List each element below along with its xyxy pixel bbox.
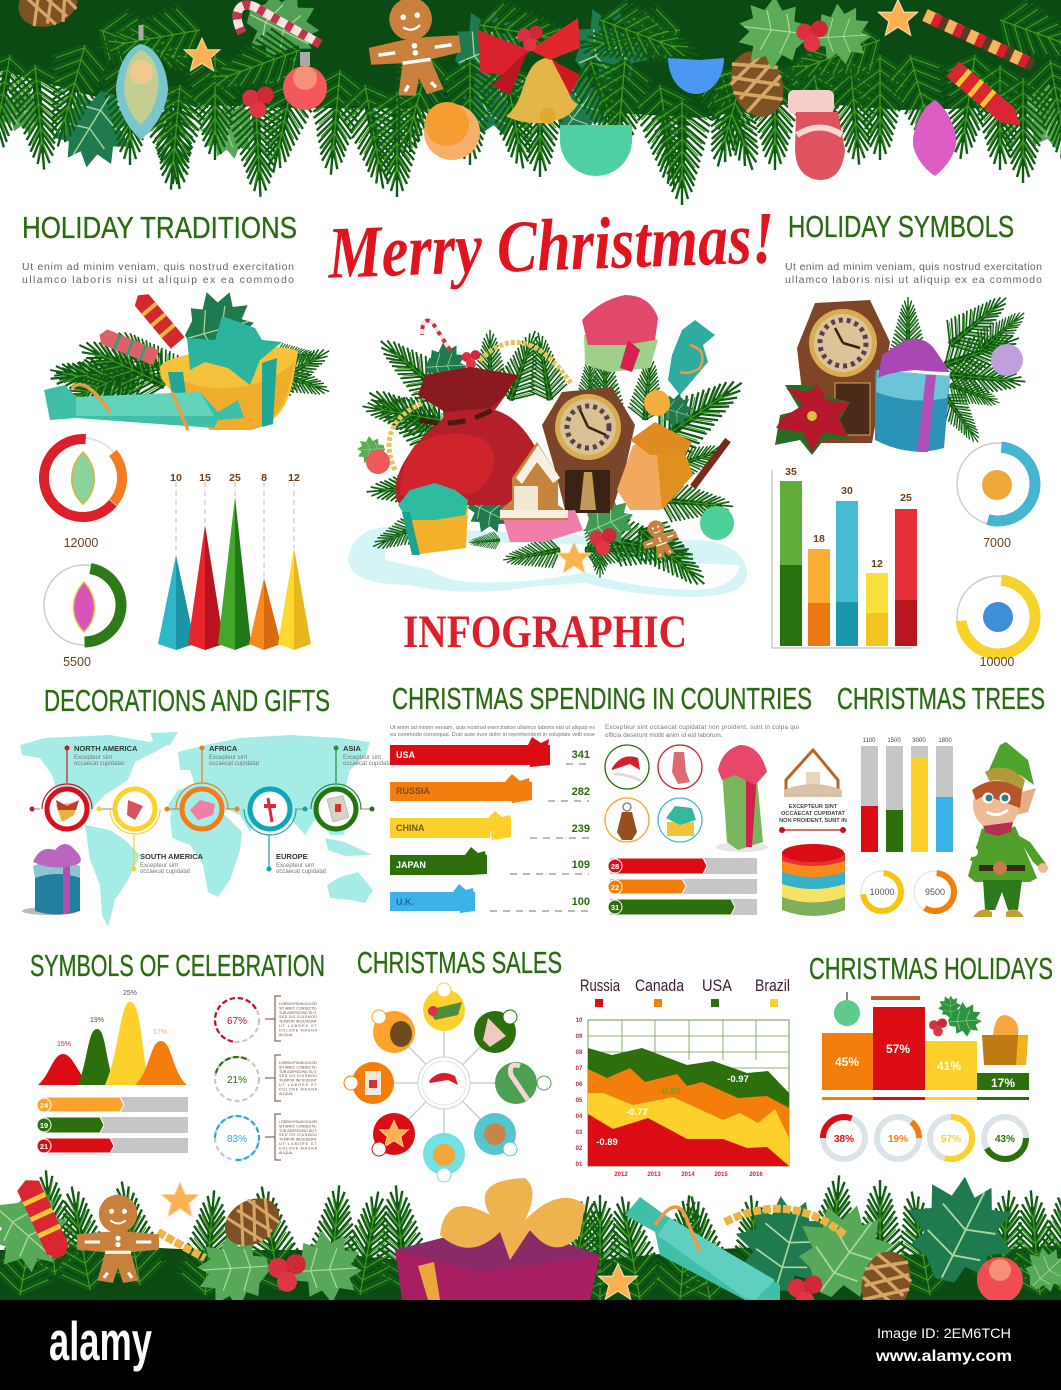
area chart [576, 1018, 789, 1178]
chart legend: USA [702, 976, 733, 995]
donut: 19%: 19% [888, 1134, 908, 1145]
node: star [372, 1113, 415, 1156]
europe marker: EUROPE [276, 852, 308, 861]
note 2: TUR ADIPISCING ELIT, [279, 1070, 317, 1074]
snow base [348, 527, 747, 597]
heading: symbols of celebration: SYMBOLS OF CELEBRATION [30, 948, 325, 983]
europe marker [244, 789, 326, 875]
text: excepteur note: officia deserunt mollit anim id est laborum. [605, 732, 723, 739]
progress bars: celebration: 19 [40, 1121, 48, 1130]
bar: UK [390, 884, 475, 913]
area values: -0.97 [727, 1074, 749, 1085]
icon: blue ball [983, 602, 1013, 632]
north america marker [30, 744, 138, 829]
values [170, 472, 300, 484]
note 1: LOREM IPSUM DOLOR [279, 1002, 317, 1006]
node: orange ball [423, 1133, 465, 1182]
bead garland [389, 342, 572, 470]
rocket candy [131, 290, 185, 349]
gauge 21%: 21% [227, 1075, 247, 1086]
holly leaves [357, 342, 698, 554]
gingerbread man [77, 1195, 159, 1283]
africa marker [164, 744, 259, 829]
values: 239 [572, 823, 590, 835]
labels: 25% [123, 990, 137, 997]
values: 12 [871, 558, 883, 570]
icon circles [605, 745, 702, 842]
text: spending intro: Ut enim ad minim veniam, quis nostrud exercitation ullamco laboris nisi ut aliquip ex [390, 725, 595, 731]
note 2: SIT AMET, CONSECTE- [279, 1065, 318, 1069]
node: candy cane [495, 1062, 551, 1104]
values: 12 [288, 472, 300, 484]
red sack [395, 367, 552, 505]
note 3: ALIQUA. [279, 1151, 293, 1155]
chart legend: Russia [580, 976, 620, 995]
north america marker: occaecat cupidatat [74, 761, 124, 767]
europe marker: occaecat cupidatat [276, 869, 326, 875]
y axis: 09 [576, 1034, 583, 1040]
star [161, 1182, 199, 1216]
label: 10000: 10000 [980, 655, 1014, 669]
values: 1100 [863, 738, 876, 744]
donut: 9500 [914, 871, 956, 913]
teal candy [44, 385, 244, 428]
area values [596, 1074, 749, 1148]
values: 282 [572, 786, 590, 798]
purple gift with gold bow [395, 1178, 600, 1300]
text: symbols intro: Ut enim ad minim veniam, quis nostrud exercitation [785, 261, 1042, 273]
bar: China [390, 811, 511, 840]
node: calendar [344, 1062, 394, 1104]
orange gift [617, 422, 693, 510]
values: 30 [841, 485, 853, 497]
bar chart: christmas holidays: 17% [991, 1076, 1015, 1090]
red bauble [977, 1257, 1023, 1303]
values: 15 [199, 472, 211, 484]
labels: 15% [57, 1041, 71, 1048]
progress bars: celebration: 21 [40, 1142, 48, 1151]
values: 10 [170, 472, 182, 484]
y axis: 05 [576, 1098, 583, 1104]
footer logo: alamy [49, 1310, 152, 1372]
x axis [614, 1172, 763, 1178]
pine-shaped teal ornament [116, 25, 168, 140]
donut: 9500: 9500 [925, 887, 945, 897]
y axis: 08 [576, 1050, 583, 1056]
text: traditions intro: Ut enim ad minim veniam, quis nostrud exercitation [22, 261, 294, 273]
gold star top right [878, 0, 918, 35]
text: symbols intro: ullamco laboris nisi ut aliquip ex ea commodo [785, 274, 1042, 286]
teal and yellow gift [398, 483, 468, 555]
pine cone top left [12, 0, 84, 35]
note 2: DOLORE MAGNA [279, 1087, 318, 1091]
pine cone top right [722, 44, 792, 124]
icon: green bauble [834, 992, 860, 1026]
firecracker [693, 440, 728, 487]
gold beads left [158, 1232, 205, 1258]
bar: Japan [390, 847, 487, 875]
icon: garland piece [871, 996, 920, 1000]
x axis: 2013 [647, 1172, 661, 1178]
text: spending intro: ea commodo consequat. Duis aute irure dolor in reprehenderit in voluptate velit esse [390, 732, 595, 738]
beads [725, 1209, 845, 1235]
pink ornament [913, 100, 956, 176]
x axis: 2015 [714, 1172, 728, 1178]
icon: lantern [605, 798, 649, 842]
y axis: 10 [576, 1018, 583, 1024]
values: 100 [572, 896, 590, 908]
note 1: ALIQUA. [279, 1033, 293, 1037]
values [785, 466, 912, 570]
area values: -0.89 [596, 1137, 618, 1148]
values: 1800 [938, 738, 952, 744]
progress bars: celebration: 24 [40, 1101, 49, 1110]
values: 109 [572, 859, 590, 871]
values: 341 [572, 749, 590, 761]
europe marker: Excepteur sint [276, 863, 314, 869]
peak chart [38, 990, 187, 1085]
area values: -0.77 [626, 1107, 648, 1118]
rocket candy [15, 1175, 72, 1262]
y axis: 03 [576, 1130, 583, 1136]
holly leaves bottom [0, 1157, 1061, 1321]
bar chart: christmas trees [861, 738, 953, 852]
gingerbread man [363, 0, 466, 101]
asia marker [311, 744, 393, 829]
donut: 5500 [41, 562, 127, 648]
footer url: www.alamy.com [875, 1348, 1012, 1365]
south america marker: Excepteur sint [140, 863, 178, 869]
stocking [788, 90, 845, 180]
south america marker: SOUTH AMERICA [140, 852, 204, 861]
node: berries [423, 983, 465, 1031]
poinsettia [775, 384, 850, 455]
values: 8 [261, 472, 267, 484]
north america marker: NORTH AMERICA [74, 744, 138, 753]
icon: gingerbread house small [784, 750, 842, 797]
progress bars: spending: 31 [611, 903, 619, 912]
bar chart: christmas holidays: 45% [835, 1055, 859, 1069]
y axis: 04 [576, 1114, 583, 1120]
donut row: christmas holidays [823, 1108, 1026, 1168]
label: 5500: 5500 [63, 655, 91, 669]
bar chart: christmas holidays: 41% [937, 1059, 961, 1073]
teal bauble under bell [560, 125, 632, 176]
bar: Russia [390, 774, 532, 803]
note 1: SED DO EIUSMOD [279, 1015, 317, 1019]
illustration: clock with gift and poinsettia [775, 282, 1035, 455]
note 3: DOLORE MAGNA [279, 1146, 318, 1150]
heading: infographic: INFOGRAPHIC [403, 606, 687, 658]
donut: 38% [823, 1117, 865, 1159]
donut: 57% [930, 1117, 972, 1159]
y axis: 01 [576, 1162, 583, 1168]
pine cone [216, 1189, 288, 1255]
footer image id: Image ID: 2EM6TCH [877, 1325, 1011, 1341]
progress bars: celebration [37, 1097, 188, 1153]
lilac ornament [991, 344, 1023, 376]
berries [788, 1275, 822, 1310]
progress bars: spending [608, 858, 757, 915]
bar: USA: USA [396, 750, 416, 760]
candy cane [422, 321, 450, 350]
bar: UK: U.K. [396, 897, 414, 907]
note 2: UT LABORE ET [279, 1083, 318, 1087]
icon: holly [929, 996, 982, 1037]
bar chart: christmas holidays: 57% [886, 1042, 910, 1056]
pyramid chart [158, 472, 311, 650]
heading: holiday traditions: HOLIDAY TRADITIONS [22, 210, 297, 245]
donut: 43%: 43% [995, 1134, 1015, 1145]
asia marker: Excepteur sint [343, 755, 381, 761]
label: 12000: 12000 [64, 536, 98, 550]
y axis [576, 1018, 583, 1168]
bar chart: christmas holidays [822, 992, 1029, 1100]
candy cane [237, 5, 320, 44]
pink cake [502, 510, 583, 542]
central illustration: santa sack, clock, gifts [348, 295, 758, 602]
labels: 17% [153, 1029, 167, 1036]
gold bell with red bow [478, 18, 580, 124]
bottom pine garland [0, 1157, 1061, 1321]
icon: round teal gift [22, 844, 81, 915]
progress bars: spending: 28 [611, 862, 619, 871]
bar: Japan: JAPAN [396, 860, 426, 870]
donut: 57%: 57% [941, 1134, 961, 1145]
icon: santa hat [605, 745, 649, 789]
gingerbread house [500, 442, 568, 520]
illustration: gift with candy [44, 284, 339, 430]
note 2: LOREM IPSUM DOLOR [279, 1061, 317, 1065]
values [572, 749, 590, 908]
blue gift [875, 370, 950, 452]
icon: ornament [72, 452, 94, 504]
south america marker [96, 789, 204, 875]
text: excepteur note: Excepteur sint occaecat cupidatat non proident, sunt in culpa qui [605, 724, 799, 731]
node: pine cone [372, 1010, 415, 1053]
y axis: 06 [576, 1082, 583, 1088]
berries [462, 350, 480, 369]
holly with berries top right [733, 0, 871, 75]
x axis: 2012 [614, 1172, 628, 1178]
gauge 21% [210, 1052, 264, 1106]
africa marker: Excepteur sint [209, 755, 247, 761]
illustration: elf [968, 742, 1048, 917]
pink rocket candy [97, 327, 159, 365]
stacked discs chart [782, 844, 845, 916]
donut: 43% [984, 1117, 1026, 1159]
bar: China: CHINA [396, 823, 425, 833]
note 3: SED DO EIUSMOD [279, 1133, 317, 1137]
berries [268, 1254, 306, 1292]
values: 35 [785, 466, 797, 478]
star ornament [184, 38, 220, 71]
south america marker: occaecat cupidatat [140, 869, 190, 875]
pine cone [855, 1246, 917, 1320]
clock body [797, 300, 890, 443]
heading: decorations and gifts: DECORATIONS AND GIFTS [44, 683, 330, 718]
note 3: LOREM IPSUM DOLOR [279, 1120, 317, 1124]
berries [242, 86, 274, 118]
world map [20, 732, 373, 927]
bar chart: holiday symbols [772, 466, 917, 648]
labels: 19% [90, 1017, 104, 1024]
gauge 83%: 83% [227, 1134, 247, 1145]
note 1: SIT AMET, CONSECTE- [279, 1006, 318, 1010]
gauge 67% [212, 995, 262, 1045]
text: traditions intro: ullamco laboris nisi ut aliquip ex ea commodo [22, 274, 294, 286]
star [598, 1264, 638, 1299]
icon: tall gift [716, 745, 768, 852]
footer bar [0, 1300, 1061, 1390]
pink and green gift [582, 295, 658, 372]
divider with dots [779, 827, 846, 833]
label: 7000: 7000 [983, 536, 1011, 550]
values [863, 738, 952, 744]
values: 3000 [912, 738, 926, 744]
y axis: 02 [576, 1146, 583, 1152]
note 1: UT LABORE ET [279, 1024, 318, 1028]
teal candy [625, 1197, 780, 1300]
timeline: regions on map [30, 744, 393, 875]
donut: 7000 [957, 443, 1039, 525]
heading: christmas sales: CHRISTMAS SALES [357, 945, 562, 980]
berries [590, 528, 616, 555]
icon: pink ornament [74, 582, 94, 632]
note 3: TUR ADIPISCING ELIT, [279, 1129, 317, 1133]
heading: spending in countries: CHRISTMAS SPENDING IN COUNTRIES [392, 681, 812, 716]
gauge 83% [215, 1116, 259, 1160]
donut: 19% [868, 1108, 928, 1168]
note 1: TEMPOR INCIDIDUNT [279, 1020, 318, 1024]
text: gingerbread note: OCCAECAT CUPIDATAT [781, 811, 846, 817]
donut: 10000 trees [861, 871, 903, 913]
note 2: SED DO EIUSMOD [279, 1074, 317, 1078]
text: gingerbread note: NON PROIDENT, SUNT IN [779, 818, 847, 824]
progress bars: spending: 22 [611, 883, 619, 892]
values: 18 [813, 533, 825, 545]
green bauble [700, 506, 734, 540]
note 1: TUR ADIPISCING ELIT, [279, 1011, 317, 1015]
striped candy stick [925, 15, 1033, 65]
teal candy [668, 320, 715, 395]
asia marker: ASIA [343, 744, 362, 753]
orange bauble [644, 390, 670, 416]
chart legend [580, 976, 790, 1007]
africa marker: AFRICA [209, 744, 238, 753]
icon: open gift [982, 1015, 1028, 1065]
gauge 67%: 67% [227, 1016, 247, 1027]
rocket candy [946, 61, 1027, 133]
bar: Russia: RUSSIA [396, 786, 431, 796]
blue bauble [668, 58, 724, 94]
note 3: SIT AMET, CONSECTE- [279, 1124, 318, 1128]
africa marker: occaecat cupidatat [209, 761, 259, 767]
icon: santa hat [429, 1073, 458, 1085]
donut: 10000 trees: 10000 [869, 887, 895, 897]
red bauble [283, 52, 327, 110]
node: gingerbread [474, 1113, 517, 1156]
dashed gauges [210, 995, 264, 1160]
x axis: 2016 [749, 1172, 763, 1178]
x axis: 2014 [681, 1172, 695, 1178]
north america marker: Excepteur sint [74, 755, 112, 761]
note 2: ALIQUA. [279, 1092, 293, 1096]
icon: stocking [658, 745, 702, 789]
radial diagram: christmas sales [344, 983, 551, 1182]
donut: 10000 [957, 576, 1039, 658]
node: bell [474, 1010, 517, 1053]
chart: spending by country [390, 737, 590, 913]
text: gingerbread note: EXCEPTEUR SINT [789, 804, 838, 810]
holly leaves back [0, 0, 1061, 183]
note 2: TEMPOR INCIDIDUNT [279, 1079, 318, 1083]
clock [542, 387, 635, 513]
chart legend: Canada [635, 976, 684, 995]
asia marker: occaecat cupidatat [343, 761, 393, 767]
labels [57, 990, 167, 1048]
gingerbread man [637, 515, 683, 563]
top pine garland [0, 0, 1061, 205]
bar: USA [390, 737, 550, 767]
red bauble [366, 450, 390, 474]
brackets and lorem notes [265, 996, 318, 1160]
donut: 38%: 38% [834, 1134, 854, 1145]
chart legend: Brazil [755, 976, 790, 995]
note 3: UT LABORE ET [279, 1142, 318, 1146]
area values: -0.82 [659, 1086, 681, 1097]
yellow round box [160, 347, 298, 430]
icon: small gift [658, 798, 702, 842]
icon: orange ball [982, 470, 1012, 500]
values: 25 [900, 492, 912, 504]
values: 25 [229, 472, 241, 484]
note 3: TEMPOR INCIDIDUNT [279, 1138, 318, 1142]
donut: 12000 [28, 423, 138, 533]
note 1: DOLORE MAGNA [279, 1028, 318, 1032]
teal ribbon and bow [168, 358, 277, 427]
title: merry christmas: Merry Christmas! [326, 197, 776, 295]
star [557, 542, 591, 573]
orange bauble [424, 102, 480, 160]
y axis: 07 [576, 1066, 583, 1072]
values: 1500 [887, 738, 901, 744]
